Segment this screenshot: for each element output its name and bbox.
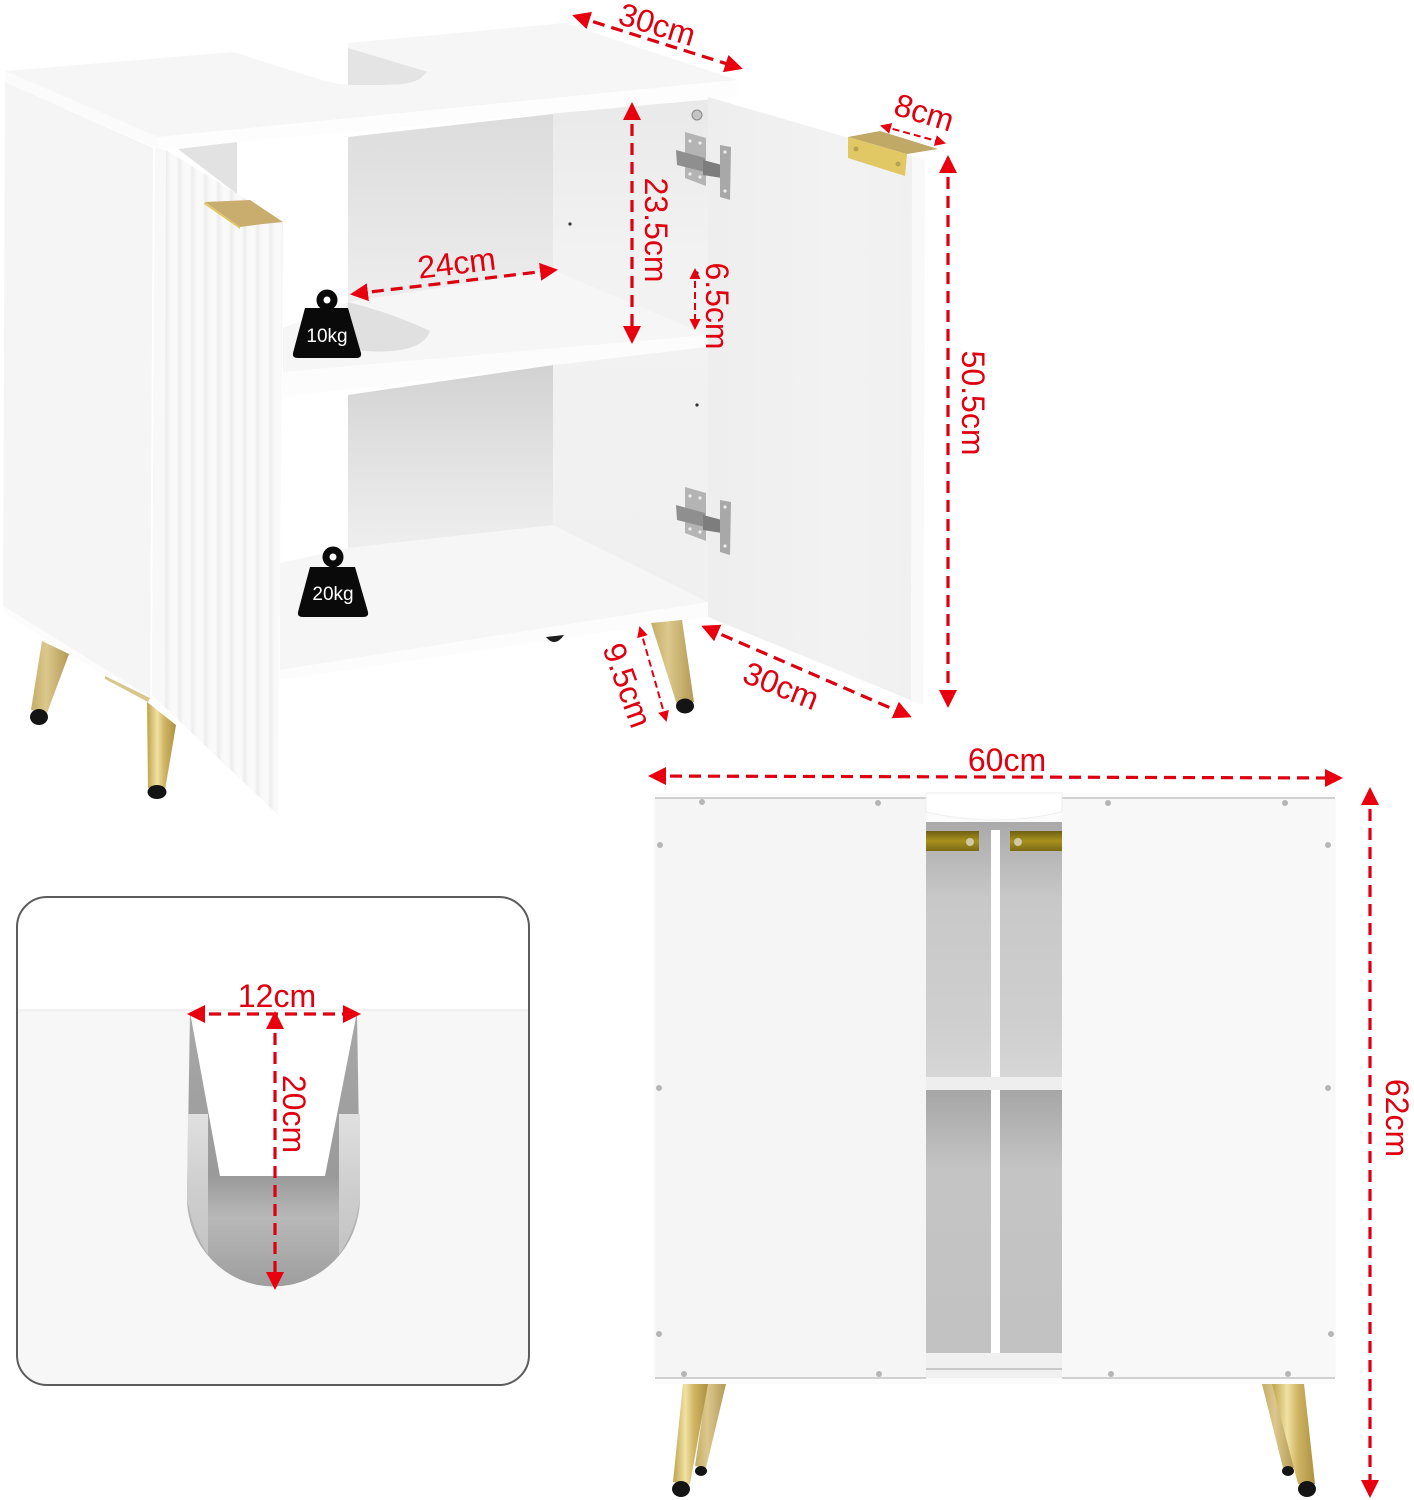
back-left partition visible through the opening [178,142,237,194]
right back panel [1062,798,1335,1378]
rear left leg [30,641,69,725]
dimension: top depth 30cm [575,0,740,68]
centre opening upper [926,822,1062,1077]
gold bracket sliver under the side panel [105,676,150,702]
back foot [546,635,564,642]
worktop surface [5,23,737,137]
panel outlines [655,798,1335,1378]
cut-out right wall [339,1114,360,1255]
fluted left door [152,148,283,815]
dimension: door depth 30cm [704,627,909,717]
left door handle [204,200,283,229]
dimension: door depth 30cm: 30cm [738,654,824,717]
bottom board [926,1353,1062,1378]
inset panel: sink cut-out detail [17,897,529,1386]
centre light slit [991,830,1000,1353]
front right leg [651,620,694,714]
front left leg [147,702,176,799]
dimension: shelf width 24cm: 24cm [416,240,498,286]
weight icon 20kg [298,550,368,617]
dimension: cut-out depth 20cm: 20cm [276,1075,312,1153]
cabinet: open perspective view [3,23,938,815]
dimension: shelf width 24cm [353,240,555,294]
dimension: total width 60cm: 60cm [968,742,1046,778]
worktop side edge [5,71,158,149]
brass bracket left [926,831,979,851]
weight icon 20kg: 20kg [312,584,354,605]
dimension: cut-out width 12cm: 12cm [238,978,316,1014]
inset board [18,1010,528,1286]
centre opening lower [926,1090,1062,1355]
cut-out left wall [187,1114,208,1255]
weight icon 10kg: 10kg [306,326,348,347]
back-right leg [1262,1384,1294,1476]
right door [708,97,925,705]
bracket screws [966,838,1022,846]
side panel bottom edge [3,606,150,704]
shelf pin holes [568,222,699,407]
shelf front edge [283,335,707,397]
worktop front edge [158,80,737,149]
dimension: cabinet body 50.5cm: 50.5cm [955,351,991,455]
dimension: total height 62cm: 62cm [1379,1079,1414,1157]
dimension: upper height 23.5cm: 23.5cm [638,178,674,282]
view through the cut-out [190,1012,357,1176]
worktop sink notch [348,46,430,86]
lower hinge [676,487,731,555]
weight icon 10kg [293,293,361,358]
front-left leg [672,1384,708,1497]
back-left leg [695,1384,726,1476]
body [653,793,1336,1384]
dimension: handle 8cm: 8cm [890,86,958,139]
left side panel [3,82,153,697]
inset border [17,897,529,1385]
left back panel [655,798,926,1378]
back panel lower [348,365,553,552]
right door handle [848,131,938,176]
back panel upper [348,114,553,310]
shelf sink notch [345,302,430,352]
dimension: leg 9.5cm: 9.5cm [596,638,659,732]
cabinet: back view [653,793,1336,1497]
assembly screws [656,799,1334,1377]
upper hinge [676,110,731,200]
right door edge [911,156,925,705]
shelf edge [926,1077,1062,1090]
brass bracket right [1010,831,1062,851]
bottom board surface [280,525,708,670]
middle shelf surface [283,270,707,372]
dimension: door gap 6.5cm: 6.5cm [699,262,735,350]
front-right leg [1272,1384,1316,1497]
worktop notch [926,793,1062,820]
bottom board front edge [280,602,708,680]
cut-out shadow [187,1012,360,1286]
inner right panel [553,97,708,617]
